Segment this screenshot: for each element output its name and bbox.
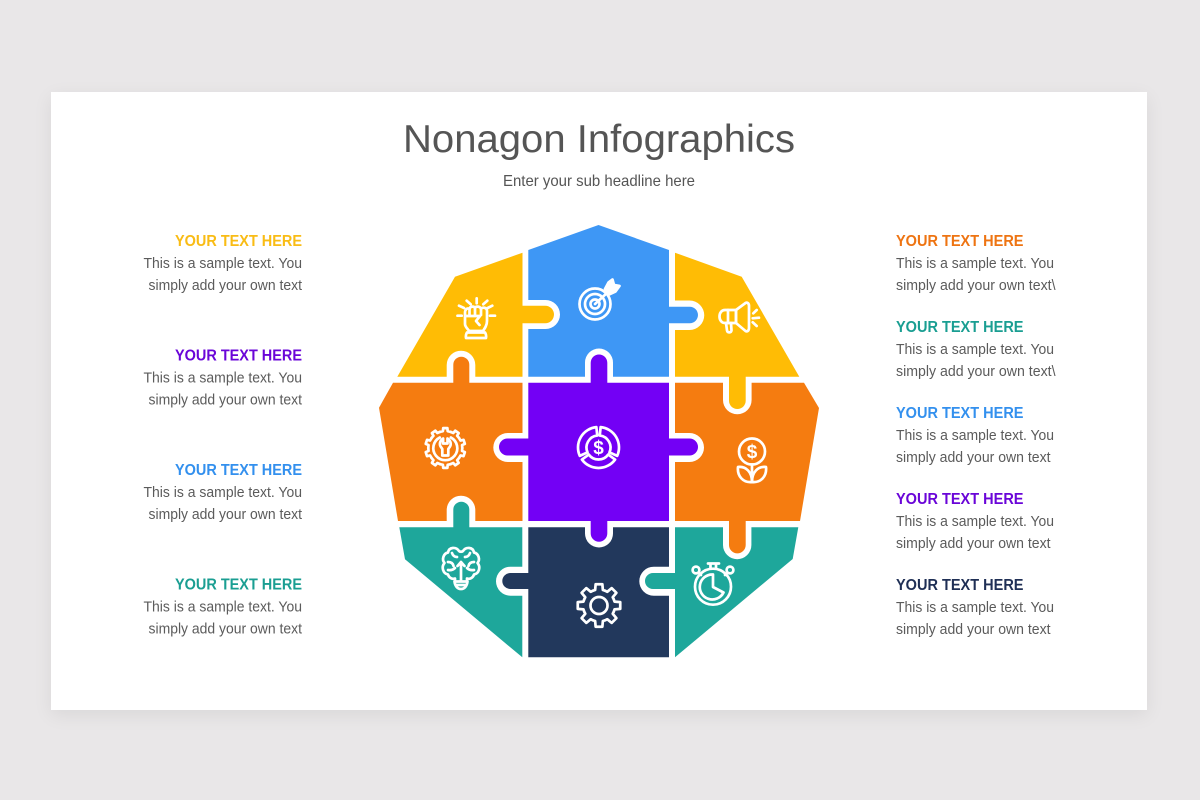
text block: left purple: This is a sample text. You <box>144 370 302 386</box>
icon: gear <box>578 584 620 627</box>
text block: left teal: simply add your own text <box>148 622 302 638</box>
icon: stopwatch <box>693 564 733 605</box>
text block: right purple: YOUR TEXT HERE <box>896 491 1024 508</box>
text block: right navy <box>896 577 1054 638</box>
icon: gear with wrench <box>425 428 466 468</box>
puzzle piece: yellow top-left <box>397 253 554 377</box>
puzzle piece: yellow top-right <box>675 253 799 409</box>
text block: left blue: This is a sample text. You <box>144 485 302 501</box>
text block: right blue: This is a sample text. You <box>896 428 1054 444</box>
text block: right teal: This is a sample text. You <box>896 342 1054 358</box>
text block: right navy: simply add your own text <box>896 622 1050 638</box>
icon: target with arrow <box>580 280 620 320</box>
puzzle piece: blue top <box>528 225 698 377</box>
text block: left yellow: YOUR TEXT HERE <box>175 233 302 250</box>
text block: right purple <box>896 491 1054 552</box>
text block: right teal <box>896 319 1056 380</box>
text block: left purple: YOUR TEXT HERE <box>175 348 302 364</box>
text block: right navy: This is a sample text. You <box>896 600 1054 616</box>
text block: right orange: YOUR TEXT HERE <box>896 233 1024 250</box>
text block: left purple <box>144 348 302 408</box>
text block: right navy: YOUR TEXT HERE <box>896 577 1024 594</box>
puzzle piece: purple centre <box>499 354 698 542</box>
icon: dollar sign centre: $ <box>593 438 604 459</box>
title: Nonagon Infographics <box>403 118 795 161</box>
text block: right blue: YOUR TEXT HERE <box>896 405 1024 422</box>
text block: left purple: simply add your own text <box>148 392 302 408</box>
puzzle piece: teal bottom-left <box>399 502 522 657</box>
text block: left blue: YOUR TEXT HERE <box>175 462 302 479</box>
text block: right orange: This is a sample text. You <box>896 256 1054 272</box>
text block: left teal: This is a sample text. You <box>144 600 302 616</box>
text block: right purple: This is a sample text. You <box>896 514 1054 530</box>
text block: left teal: YOUR TEXT HERE <box>175 576 302 594</box>
text block: left teal <box>144 576 302 638</box>
text block: right blue <box>896 405 1054 466</box>
text block: right teal: YOUR TEXT HERE <box>896 319 1024 336</box>
text block: left yellow <box>144 233 302 294</box>
icon: dollar segmented chart <box>578 427 619 468</box>
text block: left blue: simply add your own text <box>148 507 302 523</box>
icon: brain light bulb <box>443 548 479 589</box>
puzzle piece: orange right <box>675 383 819 553</box>
text block: left yellow: simply add your own text <box>148 278 302 294</box>
nonagon puzzle chart <box>379 225 819 657</box>
puzzle piece: orange left <box>379 357 522 521</box>
icon: megaphone <box>720 303 759 332</box>
text block: right blue: simply add your own text <box>896 450 1050 466</box>
icon: flower dollar sign: $ <box>747 442 758 463</box>
text block: right teal: simply add your own text\ <box>896 364 1056 380</box>
text block: left blue <box>144 462 302 523</box>
text block: right orange: simply add your own text\ <box>896 278 1056 294</box>
text block: right orange <box>896 233 1056 294</box>
puzzle piece: navy bottom <box>502 527 669 657</box>
text block: right purple: simply add your own text <box>896 536 1050 552</box>
icon: money flower <box>738 438 766 482</box>
puzzle piece: teal bottom-right <box>645 527 798 657</box>
subtitle: Enter your sub headline here <box>503 173 695 190</box>
icon: raised fist <box>458 298 495 338</box>
panel: white slide card <box>51 92 1147 710</box>
text block: left yellow: This is a sample text. You <box>144 256 302 272</box>
